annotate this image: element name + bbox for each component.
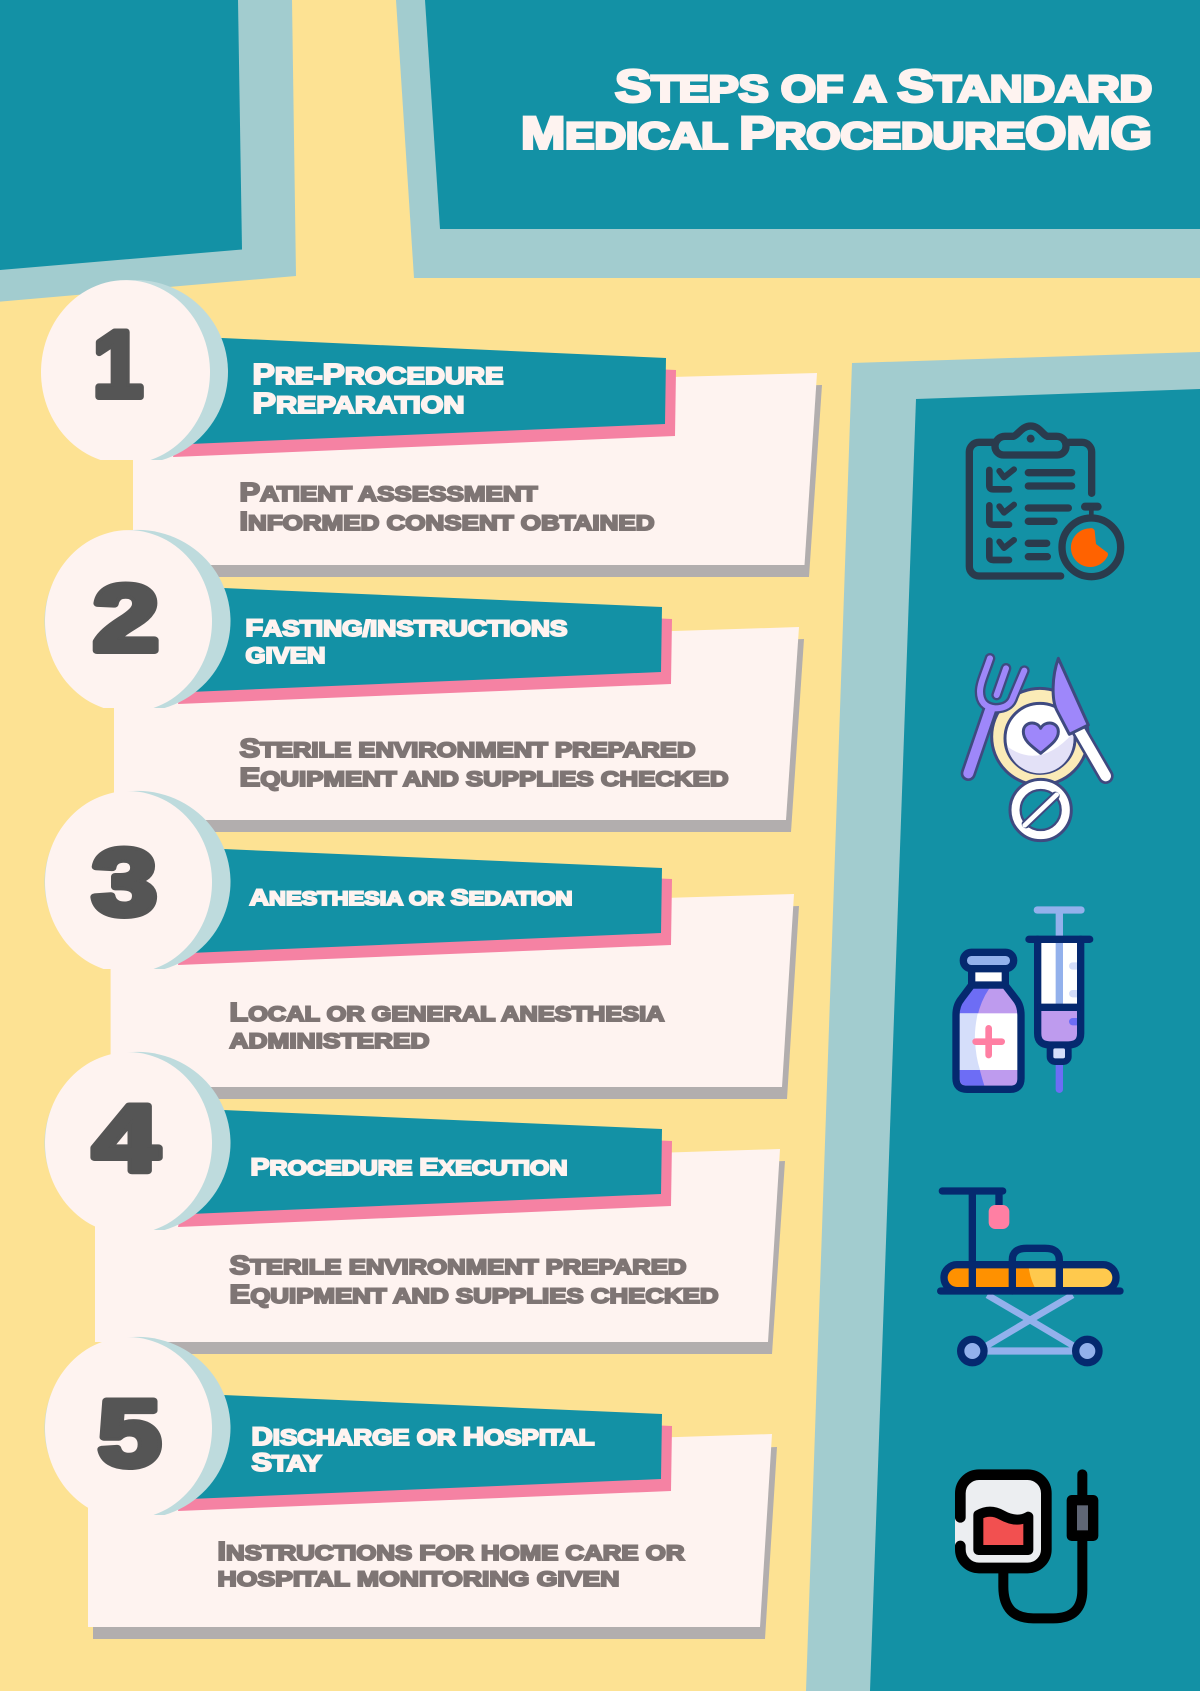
number 4: 4 — [93, 1086, 159, 1190]
panel: title block — [396, 0, 1200, 278]
description: step 2: EQUIPMENT AND SUPPLIES CHECKED — [240, 762, 728, 792]
heading: step 5 — [252, 1423, 594, 1477]
heading: step 1: PREPARATION — [252, 388, 464, 420]
heading: step 2: GIVEN — [246, 643, 326, 668]
description: step 1 — [240, 479, 654, 536]
panel: right icon column — [806, 352, 1200, 1691]
description: step 5: HOSPITAL MONITORING GIVEN — [218, 1567, 620, 1591]
icon: plate with fork, knife and prohibition sign — [968, 658, 1106, 841]
heading: step 1 — [252, 359, 504, 420]
title: MEDICAL PROCEDURE OMG — [521, 108, 1152, 158]
heading: step 2 — [246, 615, 568, 668]
description: step 4: EQUIPMENT AND SUPPLIES CHECKED — [230, 1279, 718, 1309]
number 2: 2 — [93, 566, 159, 670]
icon: medicine bottle and syringe — [956, 910, 1090, 1089]
description: step 2: STERILE ENVIRONMENT PREPARED — [240, 733, 696, 763]
panel: top left corner block — [0, 0, 296, 302]
description: step 1: PATIENT ASSESSMENT — [240, 479, 538, 507]
description: step 3 — [230, 997, 664, 1053]
heading: step 4: PROCEDURE EXECUTION — [250, 1154, 568, 1181]
description: step 1: INFORMED CONSENT OBTAINED — [240, 508, 654, 536]
description: step 3: LOCAL OR GENERAL ANESTHESIA — [230, 997, 664, 1027]
heading: step 2: FASTING/INSTRUCTIONS — [246, 615, 568, 642]
description: step 5: INSTRUCTIONS FOR HOME CARE OR — [218, 1538, 685, 1566]
number 3: 3 — [92, 830, 157, 934]
icon: blood bag with tube — [955, 1474, 1098, 1618]
heading: step 5: DISCHARGE OR HOSPITAL — [252, 1423, 594, 1451]
description: step 4 — [230, 1250, 718, 1309]
heading: step 1: PRE-PROCEDURE — [252, 359, 504, 391]
icon: clipboard checklist with stopwatch — [969, 426, 1121, 577]
step 3 — [44, 791, 799, 1099]
description: step 4: STERILE ENVIRONMENT PREPARED — [230, 1250, 686, 1280]
heading: step 5: STAY — [252, 1449, 322, 1477]
description: step 2 — [240, 733, 728, 792]
number 1: 1 — [93, 312, 143, 416]
description: step 3: ADMINISTERED — [230, 1029, 430, 1053]
icon: hospital gurney with IV bag — [941, 1191, 1120, 1363]
step 1 — [41, 280, 822, 577]
description: step 5 — [218, 1538, 685, 1591]
number 5: 5 — [98, 1380, 161, 1486]
step 5 — [44, 1337, 777, 1639]
title: STEPS OF A STANDARD — [615, 60, 1152, 112]
title — [521, 60, 1152, 158]
heading: step 3: ANESTHESIA OR SEDATION — [250, 885, 572, 910]
step 2 — [44, 530, 804, 832]
step 4 — [44, 1052, 785, 1354]
